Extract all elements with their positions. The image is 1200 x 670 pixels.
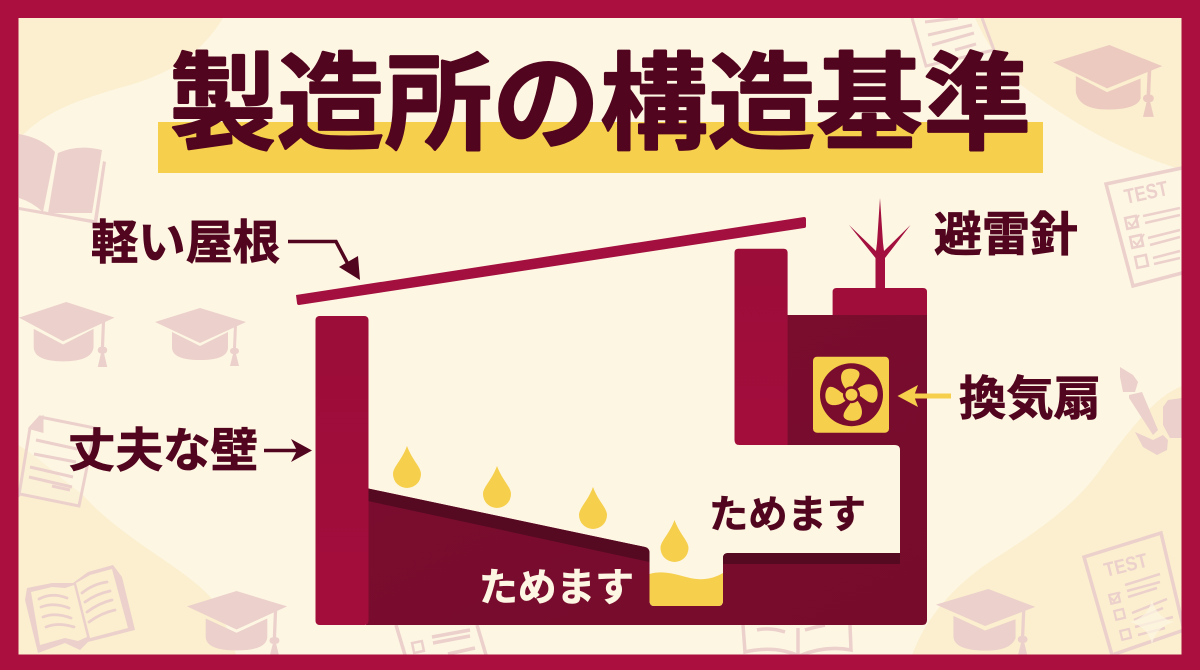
text: ためます dark: ためます xyxy=(709,494,866,537)
icon: drop 2 xyxy=(483,466,511,508)
lightning rod xyxy=(849,198,910,288)
roof xyxy=(296,217,806,305)
background blob: bottom left xyxy=(18,445,236,655)
icon: test sheet bottom right: TEST xyxy=(1102,550,1150,582)
floor shade: right xyxy=(723,553,900,564)
arrow: fan xyxy=(898,385,951,407)
icon: document left xyxy=(19,417,95,506)
icon: book top left xyxy=(19,134,106,224)
right tall wall xyxy=(734,249,788,445)
background blob: top left xyxy=(18,18,223,140)
icon: drop 4 xyxy=(660,520,688,562)
text: ためます white: ためます xyxy=(479,567,634,610)
icon: graduation cap bottom left xyxy=(187,591,287,657)
icon: document bottom xyxy=(396,625,486,655)
background blob: bottom right xyxy=(912,386,1182,655)
collection tray with liquid xyxy=(650,572,723,606)
label: lightning rod: 避雷針 xyxy=(934,208,1078,261)
icon: open book bottom xyxy=(743,625,851,656)
label: light roof: 軽い屋根 xyxy=(91,216,280,269)
label: sturdy wall: 丈夫な壁 xyxy=(68,424,258,477)
icon: ventilation fan xyxy=(813,357,889,433)
sparkle xyxy=(1130,600,1174,644)
dark floor and room body xyxy=(366,315,927,625)
label: ventilation fan: 換気扇 xyxy=(959,372,1101,425)
icon: test sheet bottom right xyxy=(1084,533,1184,655)
icon: document top right xyxy=(912,18,994,66)
icon: test sheet right top xyxy=(1106,168,1182,286)
icon: graduation cap left 1 xyxy=(19,302,115,367)
floor shade: sloped xyxy=(368,488,650,562)
icon: test sheet right top: TEST xyxy=(1122,177,1170,209)
arrow: roof xyxy=(288,242,360,280)
icon: graduation cap left 2 xyxy=(155,308,246,366)
factory diagram xyxy=(296,198,927,625)
icon: drop 1 xyxy=(393,446,421,488)
background blob: top right xyxy=(975,18,1182,170)
title: 製造所の構造基準 xyxy=(169,46,1031,164)
title highlight bar xyxy=(158,122,1043,173)
rooftop block xyxy=(833,288,927,315)
arrow: wall xyxy=(264,439,312,462)
icon: drop 3 xyxy=(579,487,607,529)
left wall xyxy=(316,316,368,625)
icon: graduation cap bottom right xyxy=(936,589,1035,656)
icon: graduation cap top right xyxy=(1053,45,1162,117)
icon: paint brush right xyxy=(1120,367,1182,455)
icon: open book bottom left xyxy=(25,565,135,653)
